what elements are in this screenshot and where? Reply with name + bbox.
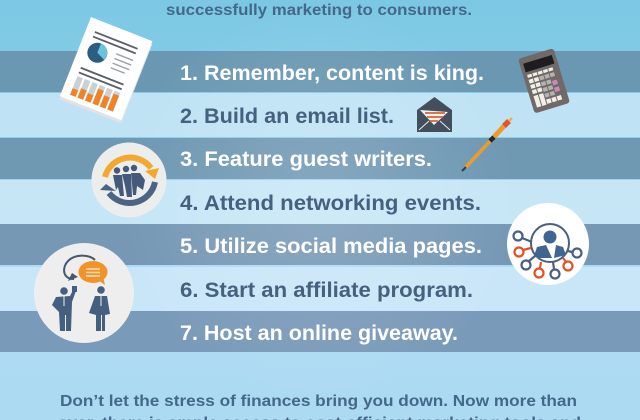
list of seven tips: 5. Utilize social media pages. (180, 235, 482, 258)
icon: calculator (518, 48, 570, 114)
list of seven tips: 1. Remember, content is king. (180, 62, 484, 85)
list of seven tips: 4. Attend networking events. (180, 192, 481, 215)
intro text: successfully marketing to consumers. (166, 2, 472, 19)
icon: pen (462, 118, 512, 171)
icon: open envelope (417, 97, 452, 132)
light stripes (0, 93, 640, 311)
list of seven tips: 2. Build an email list. (180, 105, 394, 128)
icon: team circle (92, 142, 166, 218)
closing paragraph (58, 393, 581, 420)
icon: two businessmen talking (34, 243, 134, 343)
dark stripes (0, 51, 640, 352)
list of seven tips: 7. Host an online giveaway. (180, 322, 458, 345)
list of seven tips (180, 62, 484, 345)
icon: social network circle (507, 203, 589, 285)
list of seven tips: 3. Feature guest writers. (180, 148, 432, 171)
icon: report document (59, 17, 153, 123)
closing paragraph: Don’t let the stress of finances bring you down. Now more than (60, 393, 577, 410)
list of seven tips: 6. Start an affiliate program. (180, 279, 473, 302)
